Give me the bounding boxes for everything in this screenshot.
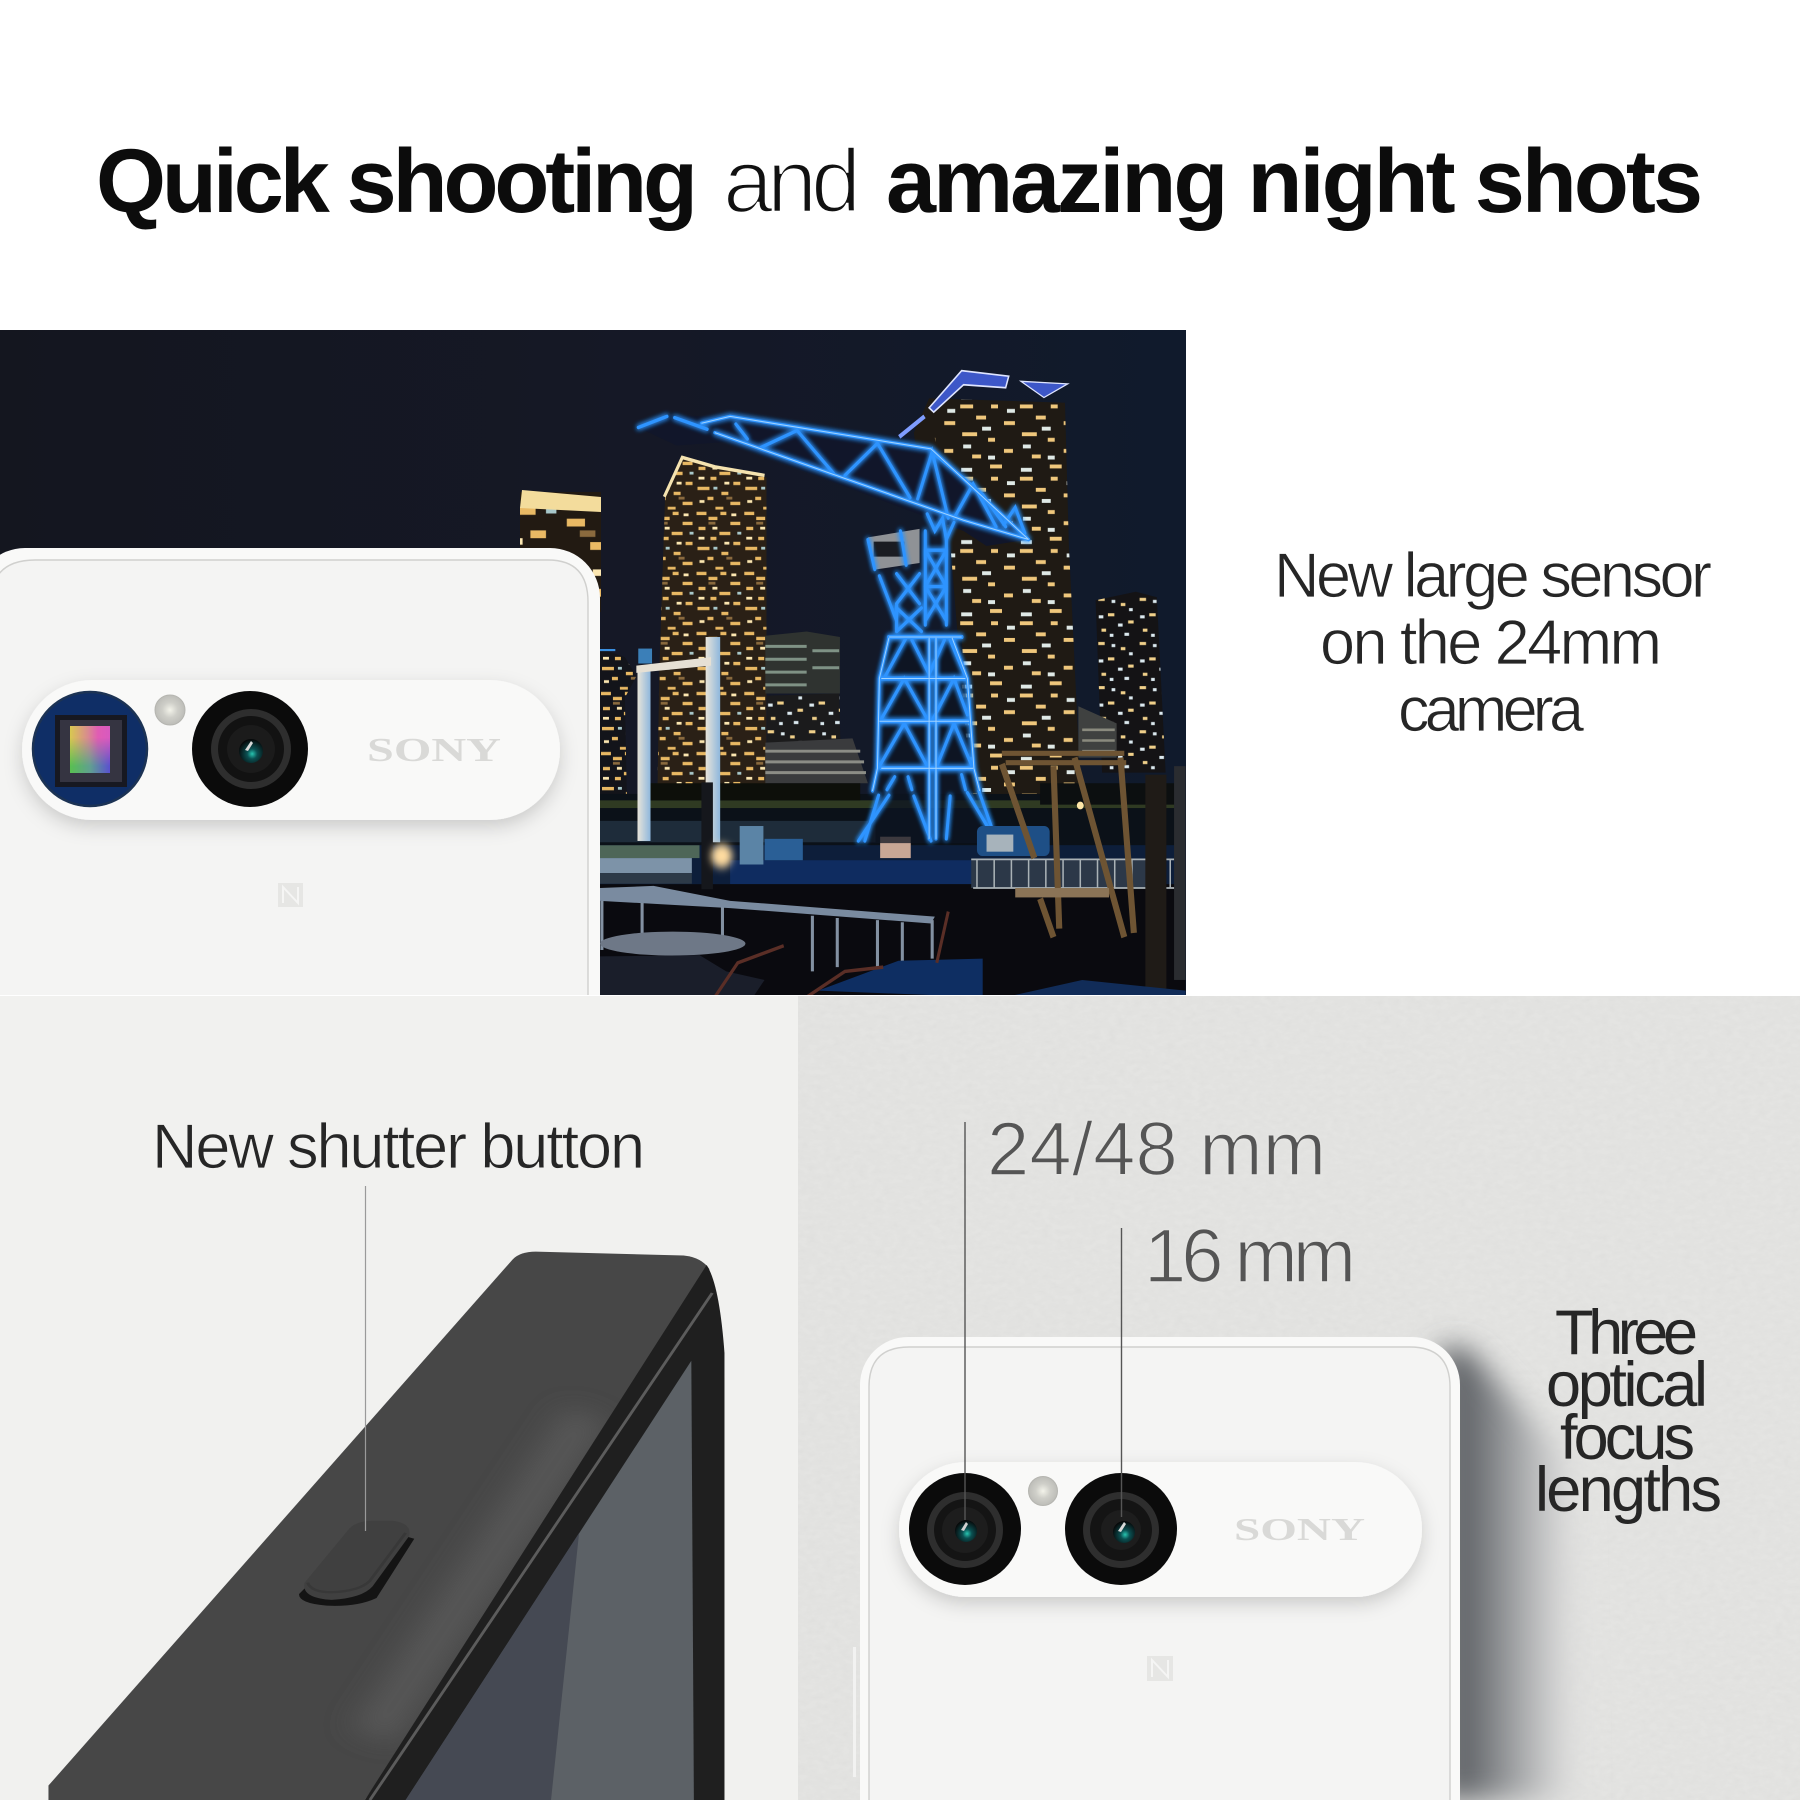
white phone back [853, 1337, 1460, 1800]
right tower [1096, 592, 1166, 773]
wooden pier frame and railing [971, 753, 1186, 989]
distant tower [520, 490, 601, 612]
panel: night photo [0, 330, 1186, 1000]
mid buildings [600, 631, 1117, 794]
NFC mark [278, 883, 303, 907]
left tower [657, 457, 766, 794]
panel: white phone back (sensor) [0, 548, 600, 995]
SONY logo: SONY [367, 732, 501, 769]
crane structure [638, 416, 1029, 843]
phone screen [406, 1361, 694, 1800]
flash [155, 695, 185, 725]
phone shadow [1440, 1345, 1585, 1800]
title: amazing night shots [886, 132, 1703, 232]
leader line: 24/48 mm [964, 1122, 966, 1520]
caption: sensor: New large sensor [1274, 541, 1712, 611]
lens: ultra wide [1065, 1473, 1177, 1585]
boat in foreground [600, 886, 1186, 997]
label: 24/48 mm: 24/48 mm [987, 1107, 1326, 1192]
caption: focal lengths: lengths [1535, 1455, 1722, 1525]
caption: focal lengths: optical [1546, 1350, 1708, 1420]
caption: sensor: camera [1398, 675, 1585, 745]
neon highlights [701, 416, 1029, 839]
lens [192, 691, 308, 807]
caption: shutter: New shutter button [152, 1112, 645, 1182]
waterfront and river [600, 783, 1186, 1000]
leader line: 16 mm [1120, 1228, 1122, 1517]
phone front bezel [365, 1265, 724, 1800]
lens: wide [909, 1473, 1021, 1585]
title [96, 132, 1703, 232]
caption: focal lengths [1535, 1298, 1722, 1525]
camera pill [22, 680, 560, 820]
phone side face [48, 1252, 712, 1800]
night sky [0, 330, 1186, 995]
panel: shutter button [0, 996, 798, 1800]
label: 16 mm: 16 mm [1144, 1214, 1356, 1299]
caption: sensor [1274, 541, 1712, 745]
dark phone edge [48, 1252, 724, 1800]
panel: focal lengths [798, 996, 1800, 1800]
open sensor module [32, 691, 148, 807]
shutter button [299, 1521, 414, 1606]
white lift bridge pillars [636, 637, 911, 889]
caption: focal lengths: Three [1555, 1298, 1698, 1368]
cityscape scene [600, 371, 1186, 1000]
flash [1028, 1476, 1058, 1506]
camera pill [899, 1462, 1422, 1597]
caption: focal lengths: focus [1560, 1403, 1695, 1473]
phone body [0, 548, 600, 995]
caption: sensor: on the 24mm [1320, 608, 1662, 678]
title: Quick shooting [96, 132, 698, 232]
crane boom body [638, 416, 1029, 546]
central high-rise [899, 371, 1079, 800]
leader line: shutter [364, 1186, 366, 1531]
title: and [723, 132, 861, 232]
SONY logo: SONY [1234, 1511, 1365, 1547]
NFC mark [1147, 1656, 1173, 1681]
neon lines [638, 416, 1029, 841]
